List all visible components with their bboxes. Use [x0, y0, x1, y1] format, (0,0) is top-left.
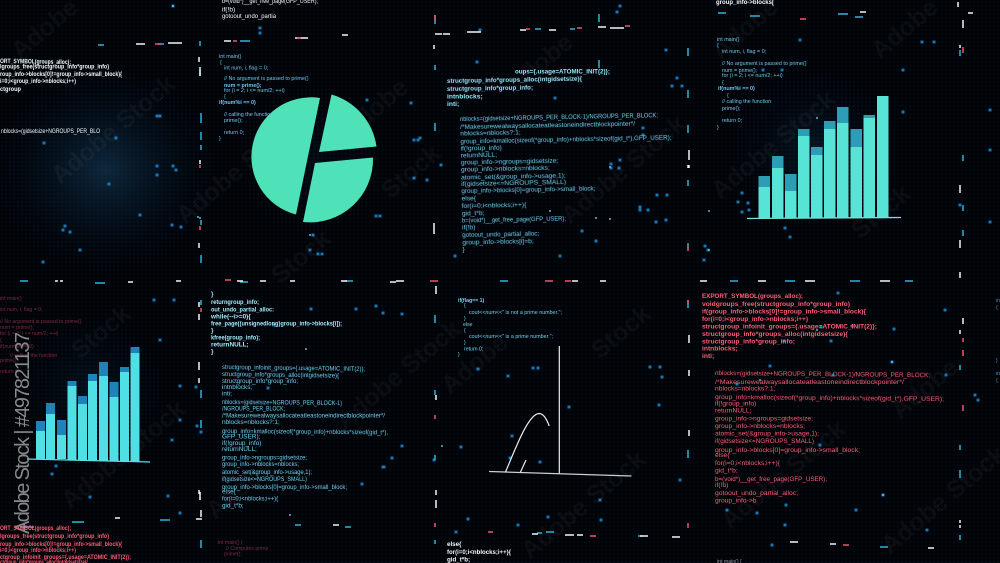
code block: bottom-left red: lgroups_free(structgroup_info*group_info)	[0, 533, 109, 540]
code block: top-left white: ORT_SYMBOL(groups_alloc);	[0, 58, 71, 66]
watermarks: Stock	[586, 299, 656, 365]
baseline	[27, 459, 150, 462]
body lines: group_info->nblocks=nblocks;	[461, 165, 550, 173]
code block: small blue if-else: else	[463, 322, 473, 328]
body lines: GFP_USER);	[222, 434, 261, 440]
bar chart: top right	[747, 96, 901, 218]
pie slice: large left	[251, 97, 320, 214]
body lines: gotoout_undo_partial_alloc;	[462, 230, 539, 239]
body lines: if(!b)	[462, 224, 476, 231]
bold lines: voidgroups_free(structgroup_info*group_info)	[702, 301, 850, 308]
code block: bottom right red	[702, 293, 944, 504]
code block: bottom-left red	[0, 525, 131, 563]
code block: small blue if-else	[458, 298, 562, 358]
pie chart	[251, 94, 376, 222]
code block: small blue top right: prime();	[722, 106, 741, 112]
body lines: if(!group_info)	[715, 400, 756, 408]
code block: small blue prime program: }	[219, 136, 221, 142]
code block: small blue top right: }	[717, 125, 719, 131]
body lines: structgroup_info*group_info;	[222, 378, 298, 385]
body lines: if(!group_info)	[460, 145, 502, 152]
watermarks: Stock	[266, 224, 336, 290]
code block: top white fragment	[222, 0, 318, 20]
code block: bottom center-left blue	[210, 291, 388, 510]
code block: small blue prime program: if(num%i == 0)	[219, 100, 256, 106]
code block: small blue top right: if(num%i == 0)	[718, 86, 755, 92]
code block: small blue top right: {	[717, 43, 719, 49]
body lines: structgroup_info*groups_alloc(intgidsetsize){	[222, 371, 340, 380]
body lines: /*Makesurewealwaysallocateatleastoneindirectblockpointer*/	[222, 412, 385, 420]
code block: small blue top right	[717, 37, 807, 131]
watermarks: Stock	[846, 179, 916, 245]
body lines: atomic_set(&group_info->usage,1);	[715, 430, 819, 438]
watermarks: Adobe Stock	[171, 110, 306, 230]
code block: top-left white: lgroups_free(structgroup_info*group_info)	[0, 64, 109, 70]
code block: faint red bottom-left: // calling the function	[10, 353, 57, 359]
body lines: if(gidsetsize<=NGROUPS_SMALL)	[461, 179, 566, 188]
body lines: group_info->blocks[0]=group_info->small_block;	[715, 447, 860, 454]
bold lines: kfree(group_info);	[211, 334, 260, 342]
bold lines: }	[211, 348, 214, 356]
body lines: else{	[715, 452, 730, 459]
line chart: white axes and curve	[490, 346, 631, 476]
watermarks: Adobe Stock	[46, 70, 181, 190]
bold lines: }	[211, 328, 214, 334]
body lines: group_info=kmalloc(sizeof(*group_info)+nblocks*sizeof(gid_t*),GFP_USER);	[460, 134, 672, 145]
baseline	[747, 218, 901, 219]
bold lines: }	[211, 291, 214, 298]
vertical stock id label: Adobe Stock | #497821137	[12, 332, 34, 534]
code block: small blue if-else: }	[458, 352, 460, 358]
code block: small blue top right: {	[722, 80, 724, 86]
bar chart: bottom left	[27, 347, 150, 462]
code fragment: right edge	[996, 298, 1000, 384]
body lines: group_info->nblocks=nblocks;	[715, 423, 805, 430]
watermarks: Stock	[66, 299, 136, 365]
bold declarations: oups={.usage=ATOMIC_INIT(2)};	[515, 68, 610, 76]
body lines: nblocks=nblocks?:1;	[222, 419, 280, 426]
code fragment: faint red under center-left block	[218, 540, 268, 558]
watermarks: Adobe Stock	[556, 110, 691, 230]
body lines: nblocks=nblocks?:1;	[715, 386, 776, 392]
code block: small blue prime program: prime();	[224, 118, 243, 124]
code block: small blue top right: // calling the function	[722, 99, 771, 105]
watermarks: Adobe Stock	[706, 85, 841, 205]
code block: small blue if-else: {	[464, 303, 466, 309]
body lines	[460, 112, 674, 253]
body lines: if(!group_info)	[222, 440, 261, 447]
code fragment: right edge: }	[996, 358, 998, 364]
body lines: gid_t*b;	[222, 502, 244, 510]
bar caps darker	[758, 107, 875, 218]
body lines: nblocks=nblocks?:1;	[460, 129, 521, 137]
code fragment: bottom center white: for(i=0;i<nblocks;i++){	[447, 549, 512, 556]
code block: faint red bottom-left: // No argument is passed to prime()	[0, 319, 82, 325]
code block: top white fragment: gotoout_undo_partia	[222, 13, 276, 20]
bold lines: intnblocks;	[702, 346, 738, 352]
code block: bottom-left red: roup_info->blocks[0]!=group_info->small_block){	[0, 541, 122, 548]
code block: small blue top right: int num, i, flag = 0;	[722, 49, 767, 55]
code block: faint red bottom-left: int main()	[0, 296, 22, 302]
code block: small blue top right: int main()	[717, 37, 740, 43]
code fragment: bottom center white	[447, 541, 512, 563]
vertical axis	[558, 346, 560, 473]
body lines: returnNULL;	[222, 446, 257, 453]
code fragment: faint red under center-left block: prime();	[224, 552, 242, 558]
code block: small blue if-else: }	[464, 340, 466, 346]
body lines: group_info->nblocks=nblocks;	[222, 461, 299, 468]
watermarks: Adobe	[201, 453, 279, 525]
pie slice: top right	[319, 94, 376, 152]
bold lines: for(i=0;i<group_info->nblocks;i++)	[702, 316, 808, 323]
code block: faint red bottom-left: int num, i, flag = 0;	[0, 307, 43, 313]
code block: top-left white: ctgroup	[0, 86, 21, 93]
body lines: group_info->blocks[i]=b;	[462, 238, 534, 246]
body lines: nblocks=(gidsetsize+NGROUPS_PER_BLOCK-1)/NGROUPS_PER_BLOCK;	[460, 112, 658, 123]
code block: bottom-left red: i=0;i<group_info->nblocks;i++)	[0, 547, 76, 554]
bar bodies	[36, 353, 140, 462]
code block: small blue if-else: cout<<num<<" is not a prime number.";	[469, 310, 562, 316]
body lines: b=(void*)__get_free_page(GFP_USER);	[715, 476, 827, 483]
code fragment: right edge: {	[996, 378, 998, 384]
watermarks: Adobe Stock	[716, 415, 851, 535]
code fragment: bottom center white: else{	[447, 541, 462, 548]
body lines: intnblocks;	[222, 384, 252, 391]
body lines: }	[462, 246, 466, 253]
curve	[506, 414, 549, 472]
body lines: if(!b)	[715, 482, 728, 489]
body lines: group_info->ngroups=gidsetsize;	[461, 158, 558, 166]
code block: small blue if-else: if(flag== 1)	[458, 298, 485, 304]
code block: top-left white: roup_info->blocks[0]!=group_info->small_block){	[0, 71, 122, 78]
code block: small blue prime program: {	[220, 60, 222, 66]
code block: small blue top right: for (i = 2; i <= num/2; ++i)	[722, 73, 783, 79]
code block: small blue top right: return 0;	[722, 118, 743, 124]
code block: small blue top right: // No argument is passed to prime()	[722, 61, 807, 67]
bold lines: returnNULL;	[211, 342, 249, 348]
code block: faint red bottom-left	[0, 296, 82, 375]
body lines: gid_t*b;	[462, 210, 485, 217]
code block: faint red bottom-left: return 0;	[0, 369, 19, 375]
watermarks: Adobe Stock	[516, 445, 651, 563]
body lines: group_info->b	[715, 498, 757, 504]
bold lines: if(group_info->blocks[0]!=group_info->small_block){	[702, 308, 866, 316]
bold lines: while(--i>=0){	[210, 314, 251, 320]
body lines: nblocks=(gidsetsize+NGROUPS_PER_BLOCK-1)/NGROUPS_PER_BLOCK;	[715, 370, 930, 379]
code block: bottom-left red: ctgroup_infoinit_groups={.usage=ATOMIC_INIT(2)};	[0, 554, 131, 561]
bold lines: inti;	[702, 353, 714, 360]
watermarks: Stock	[376, 139, 446, 205]
code block: faint red bottom-left: num = prime();	[0, 325, 34, 331]
body lines: /NGROUPS_PER_BLOCK;	[222, 406, 285, 412]
bold declarations: structgroup_info*group_info;	[447, 84, 533, 93]
code block: faint red bottom-left: {	[0, 338, 2, 344]
code block: faint red bottom-left: if(num%i == 0)	[0, 344, 34, 350]
code block: small blue top right: {	[727, 93, 729, 99]
watermarks: Adobe Stock	[331, 315, 466, 435]
code fragment: faint red under center-left block: // Computes prime	[226, 546, 268, 552]
code block: top-left white: nblocks=(gidsetsize+NGROUPS_PER_BLO	[1, 128, 100, 135]
body lines: for(i=0;i<nblocks;i++){	[715, 460, 781, 467]
code block: small blue top right: num = prime();	[722, 68, 758, 74]
body lines: if(gidsetsize<=NGROUPS_SMALL)	[222, 476, 307, 483]
code block: small blue prime program: int main()	[219, 54, 242, 60]
body lines: group_info->blocks[0]=group_info->small_block;	[461, 185, 596, 195]
code block: small blue prime program: {	[224, 94, 226, 100]
body lines: b=(void*)__get_free_page(GFP_USER);	[462, 215, 566, 224]
bar bodies	[758, 96, 888, 218]
bold lines: free_page((unsignedlong)group_info->blocks[i]);	[211, 320, 342, 328]
body lines: atomic_set(&group_info->usage,1);	[461, 172, 566, 181]
code block: small blue prime program: for (i = 2; i <= num/2; ++i)	[224, 88, 285, 94]
body lines: returnNULL;	[461, 152, 497, 159]
code fragment: faint red under center-left block: int main() {	[218, 540, 243, 546]
watermarks: Adobe	[436, 328, 514, 400]
body lines: inti;	[222, 390, 232, 398]
code block: small blue prime program: // calling the function	[224, 112, 273, 118]
body lines: returnNULL;	[715, 408, 752, 414]
code block: small blue prime program: num = prime();	[224, 83, 262, 89]
code block: small blue if-else: }	[464, 316, 466, 322]
bold declarations	[447, 68, 610, 108]
watermarks: Adobe	[336, 73, 414, 145]
body lines: if(gidsetsize<=NGROUPS_SMALL)	[715, 438, 814, 445]
bold lines: returngroup_info;	[211, 299, 259, 306]
code block: small blue prime program: return 0;	[224, 130, 245, 136]
body lines: nblocks=(gidsetsize+NGROUPS_PER_BLOCK-1)	[222, 399, 342, 407]
code block: small blue if-else: return 0;	[464, 346, 483, 352]
bold lines: structgroup_infoinit_groups={.usage=ATOMIC_INIT(2)};	[702, 324, 877, 330]
body lines: gid_t*b;	[715, 468, 738, 474]
code block: bottom-left red: ORT_SYMBOL(groups_alloc);	[0, 525, 71, 532]
body lines	[222, 364, 388, 510]
bold lines: structgroup_info*group_info;	[702, 338, 795, 346]
code block: faint red bottom-left: prime();	[0, 358, 18, 364]
body lines: for(i=0;i<nblocks;i++){	[462, 202, 527, 210]
bar caps darker	[36, 347, 140, 462]
body lines: gotoout_undo_partial_alloc;	[715, 490, 798, 497]
code block: small blue prime program: // No argument is passed to prime()	[224, 76, 309, 82]
body lines: structgroup_infoinit_groups={.usage=ATOMIC_INIT(2)};	[222, 364, 365, 373]
bold declarations: intnblocks;	[447, 94, 483, 100]
body lines: else{	[222, 488, 237, 496]
body lines: group_info->blocks[0]=group_info->small_block;	[222, 484, 347, 491]
body lines	[715, 370, 944, 504]
body lines: /*Makesurewealwaysallocateatleastoneindirectblockpointer*/	[460, 121, 635, 131]
bold lines: EXPORT_SYMBOL(groups_alloc);	[702, 293, 803, 300]
bold lines: out_undo_partial_alloc:	[211, 306, 274, 314]
watermarks: Adobe	[886, 353, 964, 425]
code block: small blue if-else: {	[464, 328, 466, 334]
watermarks: Adobe	[501, 28, 579, 100]
body lines: group_info->ngroups=gidsetsize;	[222, 454, 307, 462]
code fragment: right edge: {	[996, 305, 998, 311]
short curve stub	[520, 460, 526, 472]
code block: top-left white: i=0;i<group_info->nblocks;i++)	[0, 78, 76, 85]
watermarks: Adobe Stock	[56, 395, 191, 515]
body lines: for(i=0;i<nblocks;i++){	[222, 496, 279, 502]
pie slice: bottom right	[303, 158, 373, 222]
body lines: else{	[461, 195, 477, 202]
bold lines	[210, 291, 342, 356]
code block: top-left white	[0, 58, 122, 135]
body lines: /*Makesurewealwaysallocateatleastoneindirectblockpointer*/	[715, 379, 904, 386]
body lines: group_info=kmalloc(sizeof(*group_info)+nblocks*sizeof(gid_t*),	[222, 428, 388, 436]
body lines: group_info->ngroups=gidsetsize;	[715, 416, 813, 422]
code block: small blue if-else: cout<<num<<" is a prime number.";	[469, 334, 553, 340]
bold declarations: inti;	[447, 101, 459, 108]
bold declarations: structgroup_info*groups_alloc(intgidsetsize){	[447, 76, 582, 85]
horizontal axis	[490, 472, 631, 476]
code block: center top blue	[447, 68, 674, 253]
body lines: atomic_set(&group_info->usage,1);	[222, 469, 312, 476]
body lines: group_info=kmalloc(sizeof(*group_info)+nblocks*sizeof(gid_t*),GFP_USER);	[715, 394, 944, 403]
bold lines: structgroup_info*groups_alloc(intgidsetsize){	[702, 331, 848, 338]
code block: top white fragment: if(!b)	[222, 6, 235, 14]
code block: small blue prime program: int num, i, flag = 0;	[224, 66, 269, 72]
code block: small blue prime program	[219, 54, 309, 142]
code block: faint red bottom-left: for (i = 2; i <= num/2; ++i)	[0, 331, 59, 337]
bold lines	[702, 293, 877, 360]
